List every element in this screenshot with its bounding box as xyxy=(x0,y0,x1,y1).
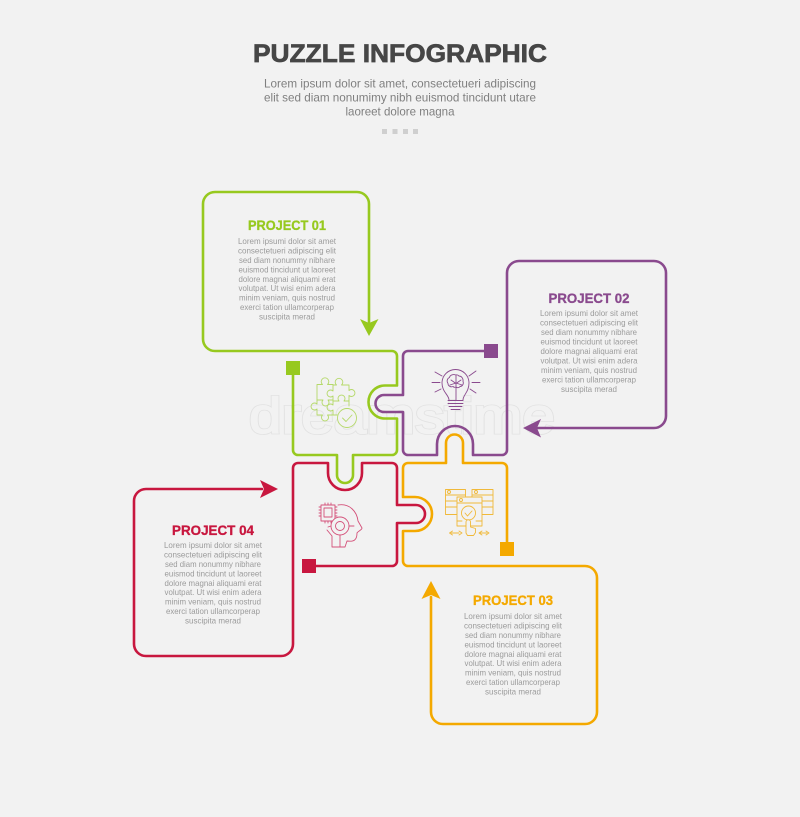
project 04 body text: euismod tincidunt ut laoreet xyxy=(164,568,262,578)
purple puzzle outline xyxy=(376,261,666,455)
panel: project 01 xyxy=(203,192,397,483)
project 01 body text xyxy=(238,236,337,322)
project 01 heading: PROJECT 01 xyxy=(248,218,326,233)
project 02 body text: exerci tation ullamcorperap xyxy=(542,374,636,384)
project 01 body text: euismod tincidunt ut laoreet xyxy=(238,264,336,274)
project 02 body text: dolore magnai aliquami erat xyxy=(540,346,638,356)
text: dreamstime xyxy=(249,388,555,444)
subtitle text block xyxy=(264,76,536,118)
project 03 body text: suscipita merad xyxy=(485,686,541,696)
title: PUZZLE INFOGRAPHIC xyxy=(253,40,547,68)
green puzzle outline xyxy=(203,192,397,483)
project 03 body text: dolore magnai aliquami erat xyxy=(464,649,562,659)
project 02 body text: minim veniam, quis nostrud xyxy=(541,365,637,375)
project 01 body text: suscipita merad xyxy=(259,312,315,322)
project 02 body text: consectetueri adipiscing elit xyxy=(540,318,639,328)
icon: AI head with chip xyxy=(319,503,362,547)
red puzzle outline xyxy=(134,463,425,656)
red arrowhead xyxy=(260,480,278,498)
project 02 body text xyxy=(540,308,639,394)
project 03 body text: minim veniam, quis nostrud xyxy=(465,668,561,678)
purple connector square xyxy=(484,344,498,358)
project 03 body text: consectetueri adipiscing elit xyxy=(464,620,563,630)
icon: web pages with touch xyxy=(446,490,493,536)
red connector square xyxy=(302,559,316,573)
subtitle text block: laoreet dolore magna xyxy=(346,104,455,118)
orange puzzle outline xyxy=(403,435,597,724)
project 01 body text: dolore magnai aliquami erat xyxy=(238,274,336,284)
project 04 body text: consectetueri adipiscing elit xyxy=(164,550,263,560)
project 03 body text: volutpat. Ut wisi enim adera xyxy=(464,658,562,668)
project 02 body text: euismod tincidunt ut laoreet xyxy=(540,336,638,346)
project 02 body text: sed diam nonummy nibhare xyxy=(541,327,637,337)
project 02 body text: Lorem ipsumi dolor sit amet xyxy=(540,308,639,318)
project 04 body text: volutpat. Ut wisi enim adera xyxy=(164,587,262,597)
icon: light bulb with brain xyxy=(432,370,480,410)
project 04 body text: sed diam nonummy nibhare xyxy=(165,559,261,569)
project 01 body text: volutpat. Ut wisi enim adera xyxy=(238,283,336,293)
project 04 heading: PROJECT 04 xyxy=(172,523,254,538)
project 04 body text xyxy=(164,540,263,626)
icon: puzzle with check xyxy=(311,378,356,428)
orange arrowhead xyxy=(422,581,440,599)
project 03 body text: exerci tation ullamcorperap xyxy=(466,677,560,687)
green arrowhead xyxy=(360,319,378,336)
project 04 body text: suscipita merad xyxy=(185,616,241,626)
panel: project 03 xyxy=(403,435,597,724)
project 04 body text: dolore magnai aliquami erat xyxy=(164,578,262,588)
project 02 body text: suscipita merad xyxy=(561,384,617,394)
project 03 body text xyxy=(464,611,563,696)
project 03 heading: PROJECT 03 xyxy=(473,593,553,608)
project 04 body text: minim veniam, quis nostrud xyxy=(165,597,261,607)
project 01 body text: minim veniam, quis nostrud xyxy=(239,293,335,303)
subtitle text block: Lorem ipsum dolor sit amet, consectetueri adipiscing xyxy=(264,76,536,90)
subtitle text block: elit sed diam nonumimy nibh euismod tincidunt utare xyxy=(264,90,536,104)
project 03 body text: euismod tincidunt ut laoreet xyxy=(464,639,562,649)
project 01 body text: sed diam nonummy nibhare xyxy=(239,255,335,265)
pagination dots xyxy=(382,129,418,134)
project 03 body text: Lorem ipsumi dolor sit amet xyxy=(464,611,563,621)
panel: project 04 xyxy=(134,463,425,656)
project 02 body text: volutpat. Ut wisi enim adera xyxy=(540,356,638,366)
project 04 body text: Lorem ipsumi dolor sit amet xyxy=(164,540,263,550)
project 01 body text: exerci tation ullamcorperap xyxy=(240,302,334,312)
project 01 body text: Lorem ipsumi dolor sit amet xyxy=(238,236,337,246)
project 03 body text: sed diam nonummy nibhare xyxy=(465,630,561,640)
project 02 heading: PROJECT 02 xyxy=(548,291,630,306)
panel: project 02 xyxy=(376,261,666,455)
purple arrowhead xyxy=(523,419,541,438)
orange connector square xyxy=(500,542,514,556)
green connector square xyxy=(286,361,300,375)
check badge xyxy=(338,408,356,428)
text: dreamstime xyxy=(249,388,555,444)
project 04 body text: exerci tation ullamcorperap xyxy=(166,606,260,616)
project 01 body text: consectetueri adipiscing elit xyxy=(238,246,337,256)
